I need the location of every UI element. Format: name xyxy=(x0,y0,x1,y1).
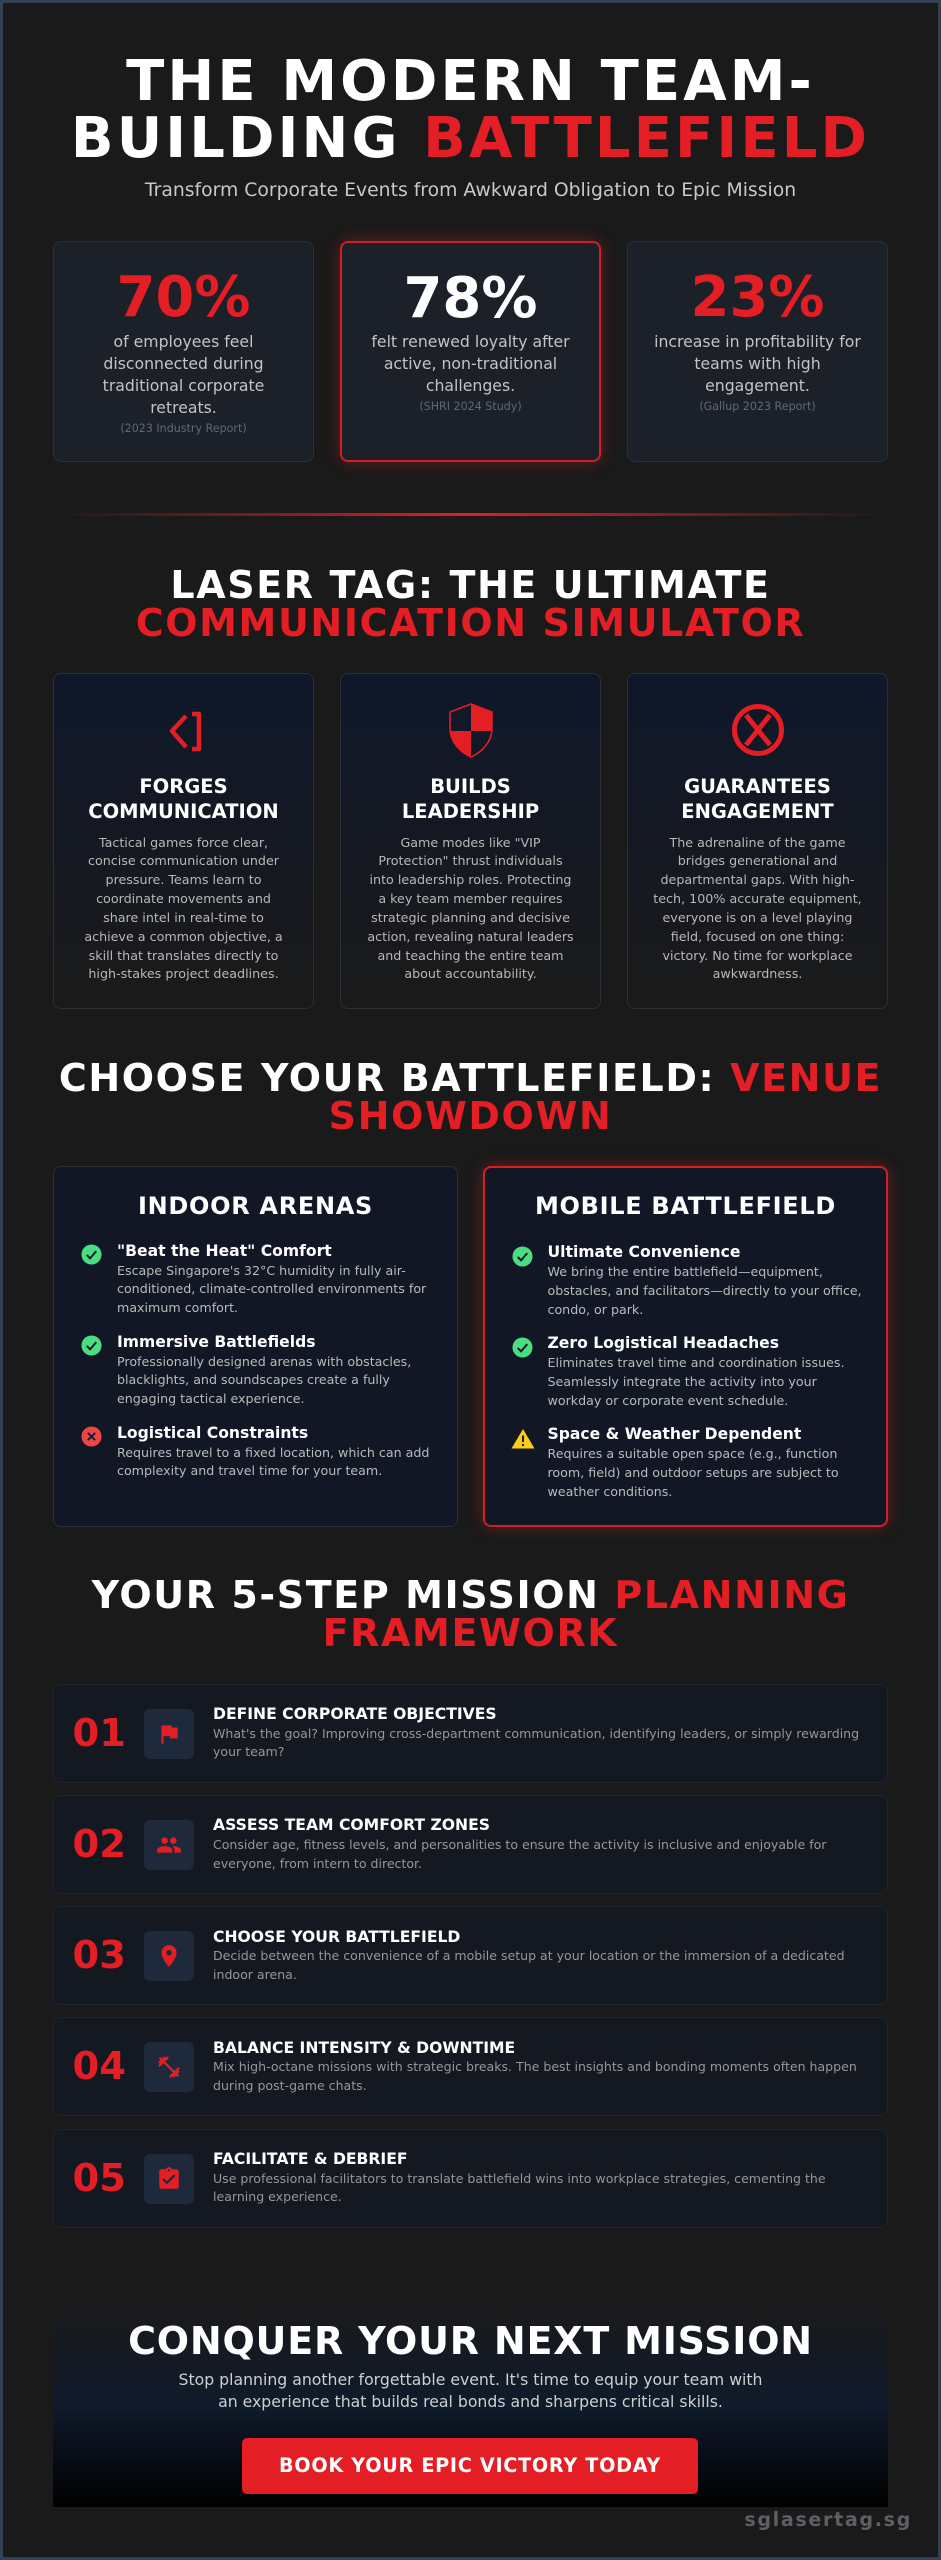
step text: indoor arena. xyxy=(213,1967,297,1982)
title: BUILDING BATTLEFIELD xyxy=(71,106,870,170)
item text: Eliminates travel time and coordination issues. xyxy=(548,1355,844,1370)
card text: high-stakes project deadlines. xyxy=(88,966,279,981)
step title: FACILITATE & DEBRIEF xyxy=(213,2150,408,2168)
panel: stat 70% xyxy=(53,241,314,462)
item text: Requires a suitable open space (e.g., function xyxy=(548,1446,837,1461)
stat description: engagement. xyxy=(705,376,810,395)
card title xyxy=(88,774,279,822)
heading: planning framework: YOUR 5-STEP MISSION PLANNING xyxy=(92,1573,849,1617)
stat description: traditional corporate xyxy=(103,376,264,395)
card text: departmental gaps. With high- xyxy=(660,872,855,887)
item text: condo, or park. xyxy=(548,1302,643,1317)
card text: about accountability. xyxy=(404,966,537,981)
item text: workday or corporate event schedule. xyxy=(548,1393,788,1408)
card text: bridges generational and xyxy=(678,853,837,868)
cta text xyxy=(179,2370,762,2411)
step text: learning experience. xyxy=(213,2189,342,2204)
card text: skill that translates directly to xyxy=(89,948,278,963)
cta heading: CONQUER YOUR NEXT MISSION xyxy=(128,2319,813,2363)
card title: BUILDS xyxy=(430,774,511,798)
icon: people xyxy=(144,1820,194,1870)
item text: obstacles, and facilitators—directly to your office, xyxy=(548,1283,862,1298)
heading: venue showdown: SHOWDOWN xyxy=(329,1094,612,1138)
item text: engaging tactical experience. xyxy=(117,1391,305,1406)
stat number: 23% xyxy=(690,265,825,330)
step text: Consider age, fitness levels, and personalities to ensure the activity is inclusive and enjoyable for xyxy=(213,1837,826,1852)
step title: CHOOSE YOUR BATTLEFIELD xyxy=(213,1928,460,1946)
item text: Escape Singapore's 32°C humidity in fully air- xyxy=(117,1262,406,1278)
icon: dumbbell xyxy=(144,2042,194,2092)
stat source: (SHRI 2024 Study) xyxy=(419,400,522,413)
card text xyxy=(84,834,283,981)
step text: Mix high-octane missions with strategic breaks. The best insights and bonding moments often happen xyxy=(213,2059,857,2074)
stat description: retreats. xyxy=(150,398,217,417)
heading: laser tag xyxy=(136,563,805,644)
step text: your team? xyxy=(213,1744,284,1759)
icon: cross xyxy=(82,1426,102,1446)
item: beat the heat xyxy=(82,1242,426,1315)
item text: weather conditions. xyxy=(548,1484,672,1499)
item text: Seamlessly integrate the activity into your xyxy=(548,1374,817,1389)
venue title: INDOOR ARENAS xyxy=(138,1192,373,1220)
item text: Professionally designed arenas with obstacles, xyxy=(117,1354,411,1368)
item text xyxy=(548,1446,839,1499)
card text: strategic planning and decisive xyxy=(371,910,570,925)
card text xyxy=(367,834,574,981)
item text: We bring the entire battlefield—equipment, xyxy=(548,1264,823,1279)
stat description: active, non-traditional xyxy=(384,354,557,373)
cta text: an experience that builds real bonds and sharpens critical skills. xyxy=(218,2392,723,2411)
step title: ASSESS TEAM COMFORT ZONES xyxy=(213,1816,490,1834)
stat number: 78% xyxy=(403,266,538,331)
cta button: BOOK YOUR EPIC VICTORY TODAY xyxy=(279,2454,661,2477)
step 03 xyxy=(53,1906,888,2005)
subtitle: Transform Corporate Events from Awkward Obligation to Epic Mission xyxy=(145,180,796,201)
card text xyxy=(653,834,862,981)
step number: 02 xyxy=(72,1822,126,1867)
step title: DEFINE CORPORATE OBJECTIVES xyxy=(213,1705,497,1723)
icon: chevron and bracket xyxy=(170,712,202,752)
item: ultimate convenience xyxy=(512,1243,862,1317)
card text: action, revealing natural leaders xyxy=(367,929,574,944)
card title xyxy=(402,774,539,822)
card text: and teaching the entire team xyxy=(377,948,564,963)
step number: 05 xyxy=(72,2156,126,2201)
panel: guarantees engagement xyxy=(627,673,888,1009)
title xyxy=(71,49,870,170)
heading: laser tag: COMMUNICATION SIMULATOR xyxy=(136,600,805,644)
step text xyxy=(213,1948,845,1982)
step text xyxy=(213,2170,826,2204)
card text: share intel in real-time to xyxy=(103,910,264,925)
cta text: Stop planning another forgettable event. It's time to equip your team with xyxy=(179,2370,762,2389)
step 02 xyxy=(53,1795,888,1894)
card title: LEADERSHIP xyxy=(402,800,539,822)
heading: venue showdown xyxy=(59,1056,882,1138)
heading: laser tag: LASER TAG: THE ULTIMATE xyxy=(170,563,771,607)
item text xyxy=(548,1355,844,1408)
card text: pressure. Teams learn to xyxy=(106,872,261,887)
icon: check xyxy=(512,1246,532,1266)
card title: ENGAGEMENT xyxy=(681,800,834,822)
step text: Use professional facilitators to translate battlefield wins into workplace strategies, cementing the xyxy=(213,2170,826,2186)
icon: check xyxy=(82,1336,102,1356)
step 01 xyxy=(53,1684,888,1782)
item text xyxy=(117,1444,429,1478)
card text: Tactical games force clear, xyxy=(99,834,268,850)
watermark: sglasertag.sg xyxy=(744,2508,912,2531)
panel: stat 78% xyxy=(340,241,601,462)
venue title: MOBILE BATTLEFIELD xyxy=(535,1192,836,1220)
item: space and weather xyxy=(512,1425,839,1499)
heading: planning framework xyxy=(91,1573,849,1654)
card text: a key team member requires xyxy=(378,891,563,906)
card text: everyone is on a level playing xyxy=(662,910,852,925)
stat description: challenges. xyxy=(426,376,515,395)
panel: builds leadership xyxy=(340,673,601,1009)
step text: during post-game chats. xyxy=(213,2078,367,2093)
step text xyxy=(213,2059,857,2093)
step title: BALANCE INTENSITY & DOWNTIME xyxy=(213,2039,515,2057)
stat description: teams with high xyxy=(694,354,821,373)
step text xyxy=(213,1726,859,1759)
step text: Decide between the convenience of a mobile setup at your location or the immersion of a dedicated xyxy=(213,1948,845,1963)
item text: complexity and travel time for your team. xyxy=(117,1463,382,1478)
icon: shield xyxy=(449,703,493,758)
item text: blacklights, and soundscapes create a fully xyxy=(117,1372,390,1387)
icon: flag xyxy=(144,1708,194,1758)
card text: Game modes like "VIP xyxy=(400,834,541,850)
heading: venue showdown: CHOOSE YOUR BATTLEFIELD: VENUE xyxy=(59,1056,882,1100)
step text: What's the goal? Improving cross-department communication, identifying leaders, or simply rewarding xyxy=(213,1726,859,1740)
step text xyxy=(213,1837,826,1871)
stat description xyxy=(371,332,570,395)
stat description: increase in profitability for xyxy=(654,332,861,351)
stat source: (Gallup 2023 Report) xyxy=(699,400,816,413)
item text: Requires travel to a fixed location, which can add xyxy=(117,1444,429,1460)
stat description: of employees feel xyxy=(114,332,253,351)
panel: stat 23% xyxy=(627,241,888,462)
heading: planning framework: FRAMEWORK xyxy=(323,1610,618,1654)
item title: Immersive Battlefields xyxy=(117,1332,316,1350)
stat description xyxy=(103,332,264,417)
panel: mobile battlefield xyxy=(483,1166,888,1527)
card text: achieve a common objective, a xyxy=(84,929,283,944)
item text xyxy=(548,1264,862,1317)
card title xyxy=(681,774,834,822)
item title: Logistical Constraints xyxy=(117,1424,308,1442)
item: immersive battlefields xyxy=(82,1332,411,1406)
item: logistical constraints xyxy=(82,1424,429,1478)
icon: check xyxy=(82,1244,102,1264)
card text: coordinate movements and xyxy=(96,891,271,906)
panel: indoor arenas xyxy=(53,1166,458,1527)
stat description: felt renewed loyalty after xyxy=(371,332,570,351)
step 04 xyxy=(53,2017,888,2116)
item text xyxy=(117,1354,411,1406)
cta button xyxy=(242,2438,698,2494)
icon: check xyxy=(512,1338,532,1358)
icon: map pin xyxy=(144,1931,194,1981)
stat description: disconnected during xyxy=(103,354,264,373)
item title: Space & Weather Dependent xyxy=(548,1425,801,1443)
step number: 04 xyxy=(72,2044,126,2089)
item text: conditioned, climate-controlled environments for xyxy=(117,1281,426,1296)
title: THE MODERN TEAM- xyxy=(126,49,815,114)
step number: 01 xyxy=(72,1711,126,1756)
item text: maximum comfort. xyxy=(117,1300,238,1315)
panel: forges communication xyxy=(53,673,314,1009)
icon: clipboard check xyxy=(144,2154,194,2204)
stat description xyxy=(654,332,861,395)
item text: room, field) and outdoor setups are subject to xyxy=(548,1465,839,1480)
icon: warning xyxy=(512,1429,534,1448)
icon: crossed circle xyxy=(732,704,784,756)
card text: Protection" thrust individuals xyxy=(378,853,563,868)
item: zero headaches xyxy=(512,1334,844,1408)
card text: awkwardness. xyxy=(713,966,802,981)
stat number: 70% xyxy=(116,265,251,330)
panel: call to action xyxy=(53,2300,888,2507)
card text: The adrenaline of the game xyxy=(669,834,846,850)
step number: 03 xyxy=(72,1933,126,1978)
step text: everyone, from intern to director. xyxy=(213,1856,422,1871)
card text: tech, 100% accurate equipment, xyxy=(653,891,862,906)
card text: concise communication under xyxy=(88,853,279,868)
card title: GUARANTEES xyxy=(684,774,831,798)
item title: Ultimate Convenience xyxy=(548,1243,740,1261)
card text: victory. No time for workplace xyxy=(662,948,853,963)
stat source: (2023 Industry Report) xyxy=(120,422,247,434)
item title: "Beat the Heat" Comfort xyxy=(117,1242,332,1260)
card text: into leadership roles. Protecting xyxy=(370,872,571,887)
card title: FORGES xyxy=(139,774,228,798)
card title: COMMUNICATION xyxy=(88,800,279,822)
item title: Zero Logistical Headaches xyxy=(548,1334,779,1352)
item text xyxy=(117,1262,426,1315)
card text: field, focused on one thing: xyxy=(671,929,844,944)
step 05 xyxy=(53,2128,888,2228)
